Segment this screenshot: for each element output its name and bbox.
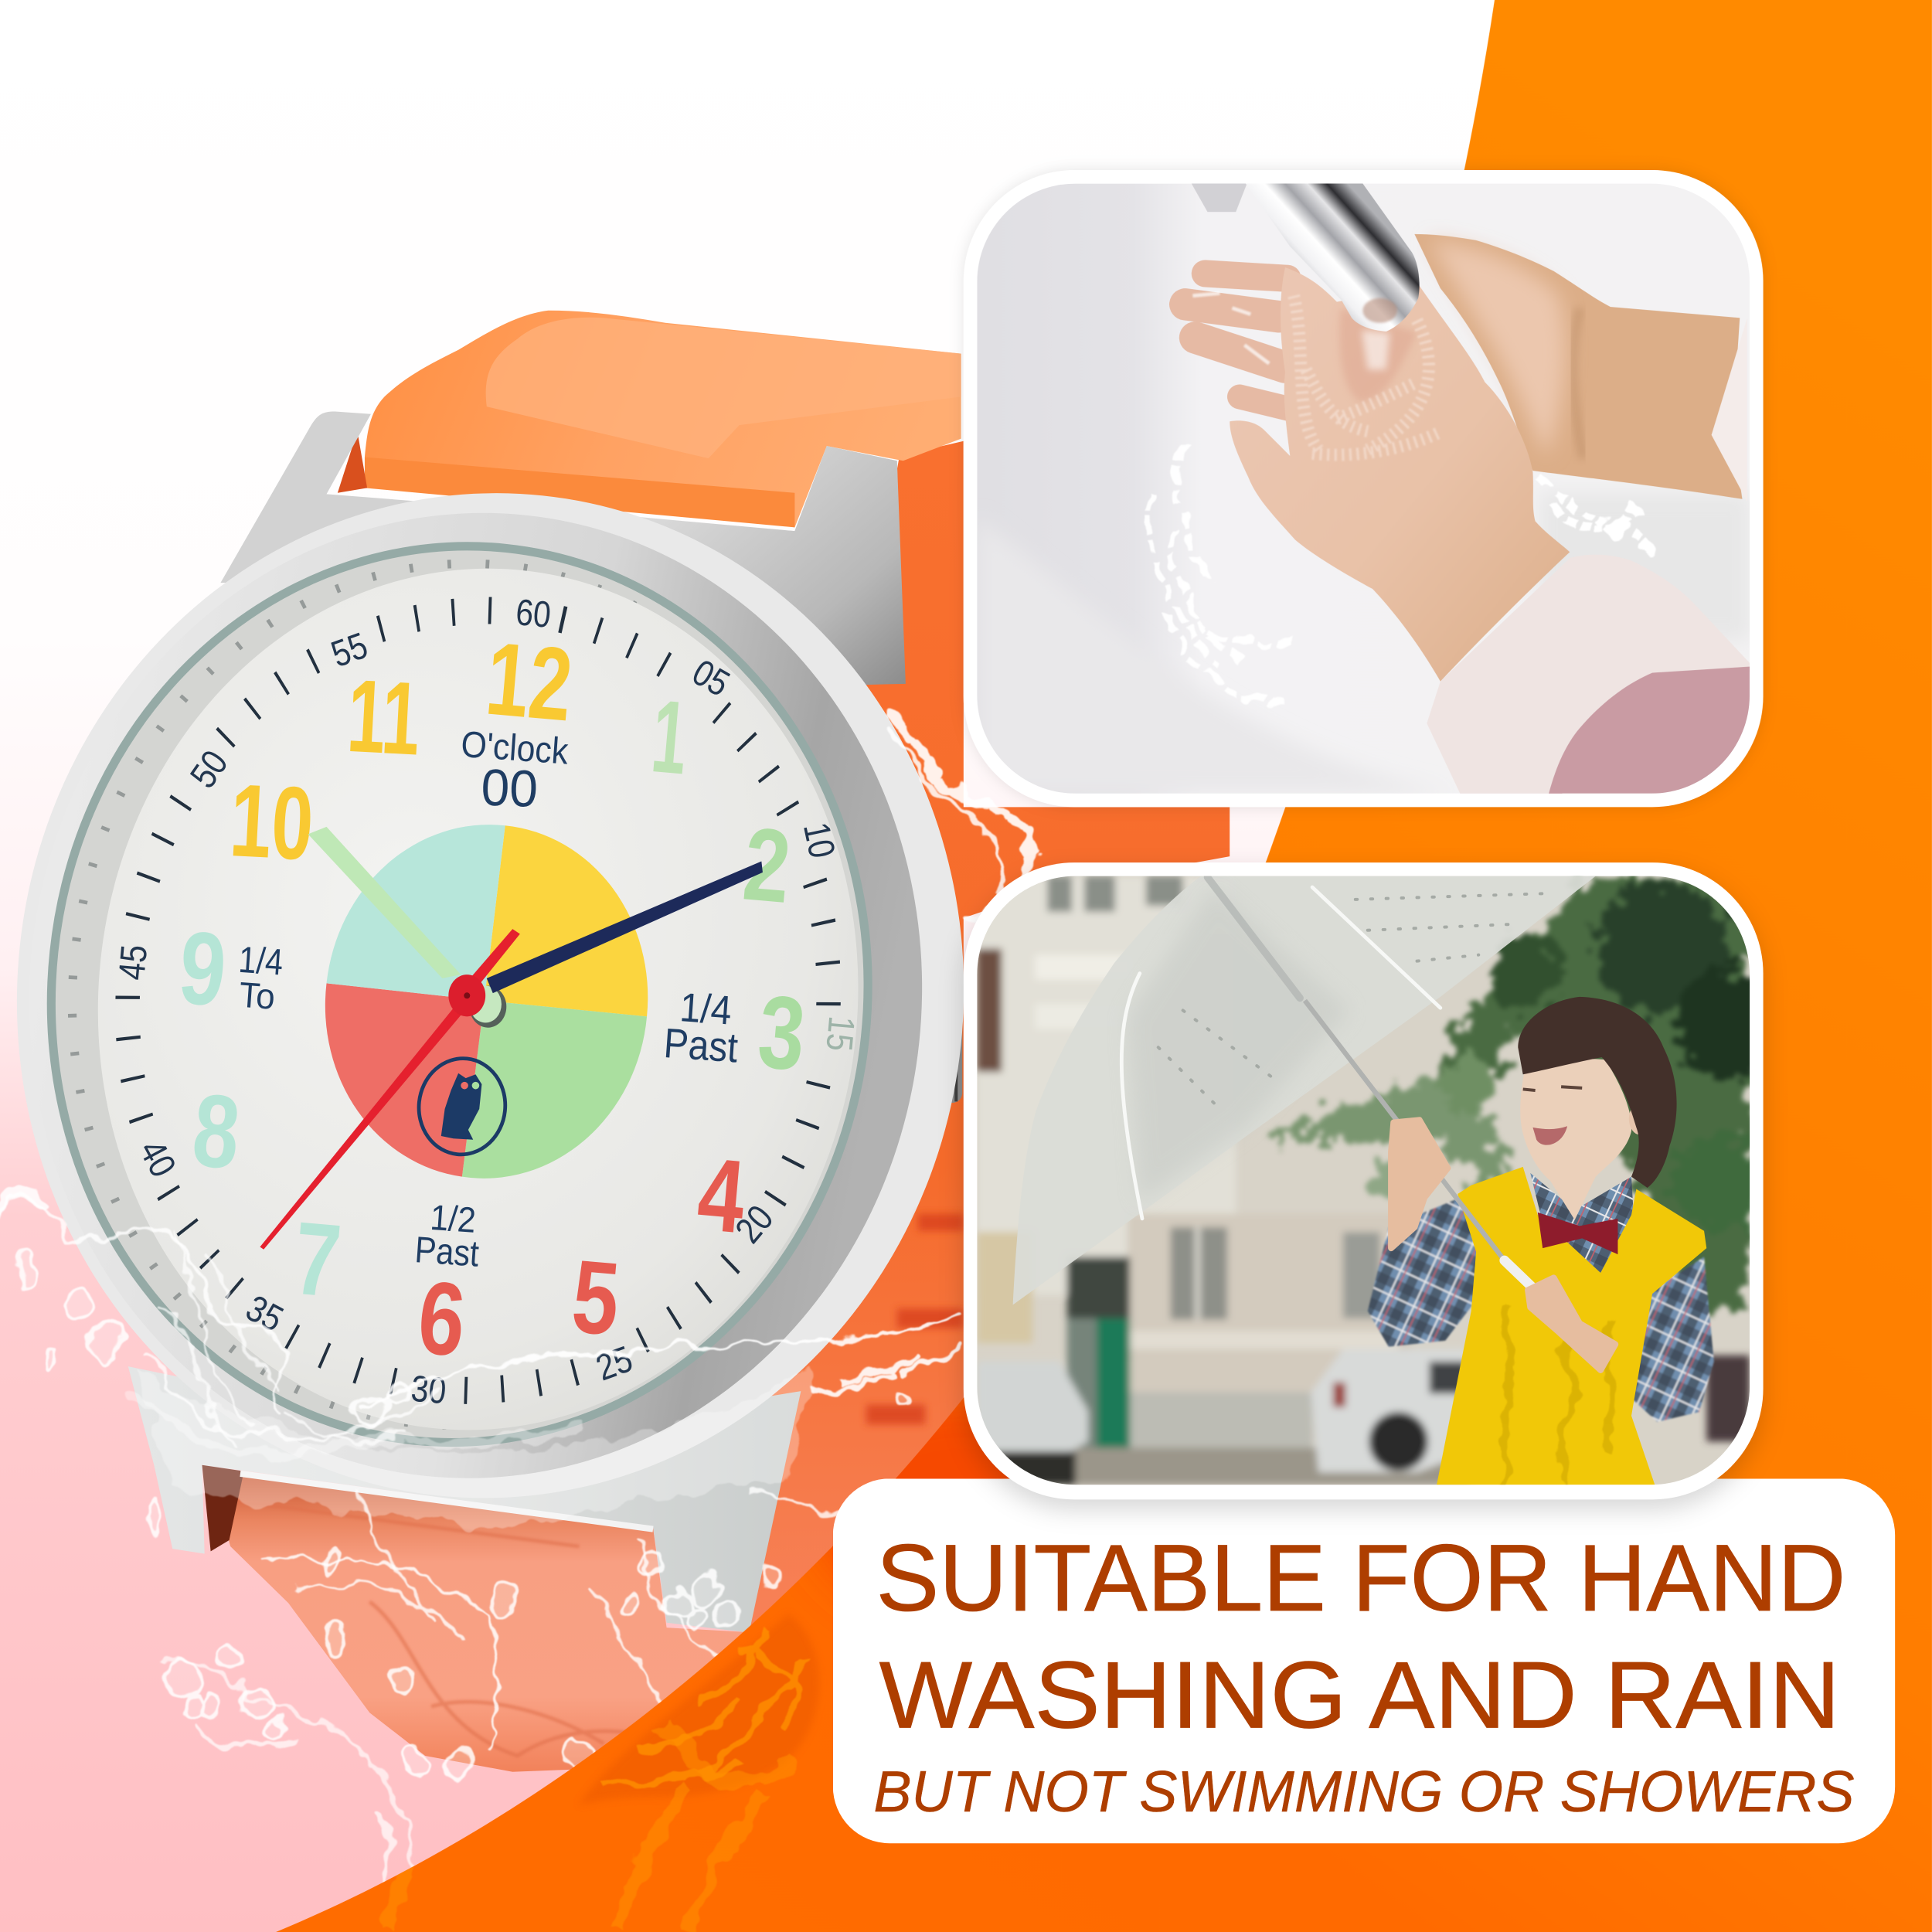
minute labels: 25 <box>591 1338 638 1389</box>
hair <box>1518 997 1677 1188</box>
minute labels: 10 <box>795 819 842 862</box>
mouth <box>1532 1126 1567 1145</box>
dial labels <box>237 724 740 1275</box>
orange shade near panels <box>379 1397 1009 1932</box>
window <box>1171 1227 1227 1320</box>
palm fold <box>1339 308 1417 402</box>
wrist crease <box>1573 308 1583 458</box>
right lug brushed surface <box>631 446 906 685</box>
back hand highlight <box>1429 240 1565 456</box>
umbrella handle <box>1505 1260 1575 1328</box>
lug slot edge <box>240 1474 653 1529</box>
front palm and wrist <box>1230 267 1570 682</box>
product: wristwatch <box>0 311 1230 1772</box>
panel: boy with umbrella in rain photo <box>964 862 1787 1499</box>
neck and face <box>1520 1059 1631 1219</box>
lower hand <box>1528 1277 1615 1370</box>
bow tie <box>1538 1213 1617 1254</box>
umbrella raindrops <box>1158 893 1553 1109</box>
dial labels: 1/2 <box>429 1197 477 1240</box>
minute labels: 40 <box>131 1134 183 1184</box>
hour numerals: 10 <box>227 761 316 882</box>
top lugs <box>220 412 903 679</box>
vest cable knit <box>1501 1306 1614 1485</box>
dial <box>56 531 900 1468</box>
minute labels: 45 <box>111 944 155 981</box>
left splash strokes <box>0 1198 282 1417</box>
right car <box>1311 1349 1466 1472</box>
dial labels: Past <box>413 1230 480 1275</box>
water splash over watch <box>0 713 1032 1897</box>
hour numerals: 2 <box>739 805 795 925</box>
hour numerals: 11 <box>345 658 423 777</box>
second hand <box>260 929 520 1250</box>
watch strap: right side behind case <box>740 441 1230 1645</box>
wave line across dial <box>359 1317 964 1406</box>
splash on right strap <box>887 713 1032 918</box>
bottom lugs <box>128 1366 801 1633</box>
sleeve lower <box>1427 555 1750 794</box>
umbrella rain shading <box>1128 887 1349 1202</box>
minute labels <box>111 592 862 1412</box>
ear <box>1629 1103 1651 1134</box>
hour hand <box>308 827 461 978</box>
water on palm <box>1294 296 1441 455</box>
minute ticks <box>54 536 902 1464</box>
building facade upper <box>977 876 1236 1295</box>
dial labels: Past <box>662 1020 740 1071</box>
caption box <box>833 1478 1895 1843</box>
hour numerals: 5 <box>568 1238 624 1357</box>
subheading: BUT NOT SWIMMING OR SHOWERS <box>873 1759 1855 1824</box>
right sleeve <box>1600 1257 1714 1422</box>
umbrella ribs <box>1121 877 1440 1219</box>
strap holes <box>866 1213 964 1424</box>
minute labels: 50 <box>182 743 236 795</box>
watch case outer <box>0 446 1013 1545</box>
left car <box>977 1362 1088 1458</box>
tree foliage <box>1269 876 1787 1306</box>
yellow vest <box>1437 1167 1706 1485</box>
finger highlights <box>1192 293 1269 363</box>
strap splash strokes <box>265 1559 498 1750</box>
dial labels: O'clock <box>460 724 570 773</box>
watch strap: top section <box>338 311 961 527</box>
water stream <box>1362 330 1389 369</box>
dial pie: quarter segments <box>325 825 648 1179</box>
back hand and wrist <box>1414 234 1742 499</box>
minute labels: 35 <box>240 1287 290 1340</box>
bezel ring <box>0 468 970 1522</box>
upper hand <box>1391 1120 1447 1248</box>
bubbles <box>19 1252 908 1783</box>
dial labels: To <box>238 975 277 1017</box>
heading line 2: WASHING AND RAIN <box>879 1642 1840 1748</box>
water ripples in sink <box>1149 444 1651 702</box>
faucet mouth reflection <box>1362 298 1397 323</box>
watch strap: bottom section under water <box>209 1472 757 1772</box>
hour numerals: 7 <box>289 1199 345 1319</box>
sleeve upper <box>1712 318 1747 502</box>
minute labels: 15 <box>818 1015 862 1053</box>
hour numerals: 1 <box>648 679 692 797</box>
minute labels: 20 <box>728 1198 781 1251</box>
pink cuff <box>1549 667 1750 794</box>
hour numerals: 6 <box>413 1259 470 1378</box>
hour numerals: 12 <box>481 620 577 743</box>
panel: hand washing photo <box>964 170 1764 807</box>
left sleeve <box>1368 1198 1481 1347</box>
hour numerals: 4 <box>693 1135 750 1255</box>
road <box>977 1447 1470 1485</box>
minute labels: 05 <box>685 652 736 705</box>
minute hand <box>487 861 763 993</box>
crown <box>918 1015 962 1104</box>
hub <box>469 986 506 1028</box>
hour numerals: 9 <box>175 909 231 1029</box>
hour numerals: 8 <box>189 1071 244 1191</box>
heading line 1: SUITABLE FOR HAND <box>876 1526 1845 1631</box>
glass ring <box>7 505 912 1483</box>
faucet <box>1246 184 1420 332</box>
reflected tick ring <box>29 525 889 1464</box>
umbrella shaft <box>1304 1001 1505 1260</box>
street background <box>977 876 1750 1485</box>
dial labels: 1/4 <box>237 940 284 984</box>
dial labels: 00 <box>480 758 539 818</box>
lug slot shadow <box>202 1465 244 1551</box>
umbrella canopy <box>1013 876 1596 1304</box>
minute labels: 55 <box>326 625 373 675</box>
fitting base <box>1192 184 1247 212</box>
eyes <box>1523 1087 1582 1090</box>
veil over lower case <box>135 1368 813 1528</box>
sink basin <box>977 184 1750 794</box>
minute labels: 30 <box>410 1369 447 1412</box>
icon: owl logo <box>414 1054 510 1158</box>
fingers <box>1185 274 1290 409</box>
window right <box>1343 1232 1380 1318</box>
collar shirt <box>1530 1173 1634 1273</box>
dial labels: 1/4 <box>679 985 733 1034</box>
building ground floor wall <box>1128 1213 1411 1441</box>
minute labels: 60 <box>514 592 553 636</box>
hour numerals <box>175 620 810 1378</box>
door <box>1067 1257 1130 1362</box>
hour numerals: 3 <box>753 973 810 1093</box>
